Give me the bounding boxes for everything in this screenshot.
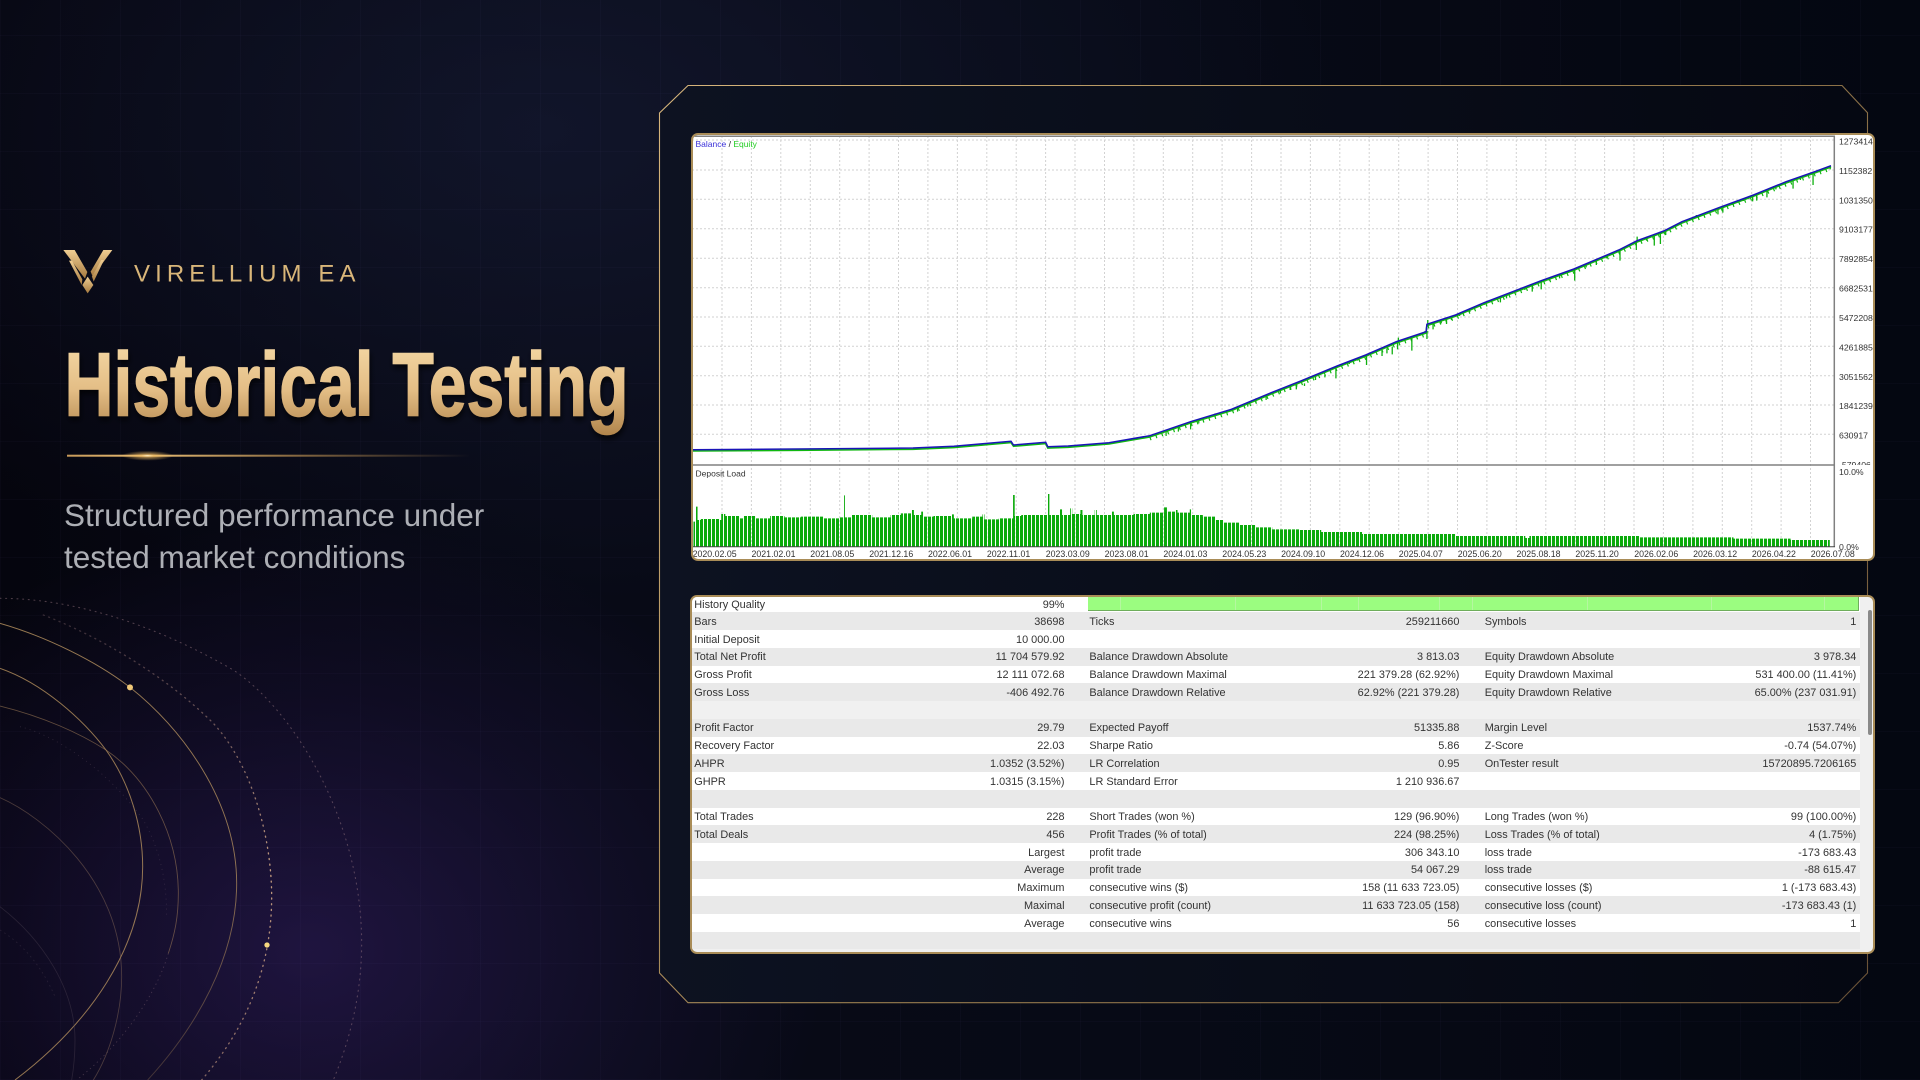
x axis dates: 2022.06.01 bbox=[928, 549, 972, 559]
x axis dates: 2024.12.06 bbox=[1340, 549, 1384, 559]
row: bars: 259211660 bbox=[1406, 616, 1459, 628]
equity line bbox=[693, 167, 1831, 451]
row: gross loss: Equity Drawdown Relative bbox=[1485, 687, 1612, 699]
row: gross profit: 221 379.28 (62.92%) bbox=[1358, 669, 1459, 681]
row: profit factor: 29.79 bbox=[1037, 722, 1064, 734]
row: total net profit bbox=[692, 648, 1860, 666]
y axis values: 3051562 bbox=[1839, 372, 1873, 382]
x axis dates: 2026.07.08 bbox=[1811, 549, 1855, 559]
row: largest trade bbox=[692, 843, 1860, 861]
row: gross loss: 65.00% (237 031.91) bbox=[1755, 687, 1856, 699]
row: total deals: Total Deals bbox=[694, 829, 748, 841]
row: profit factor: Expected Payoff bbox=[1089, 722, 1169, 734]
row: total deals: 4 (1.75%) bbox=[1809, 829, 1856, 841]
chart axes bbox=[692, 136, 1835, 547]
row: total net profit: 11 704 579.92 bbox=[996, 651, 1064, 663]
row: AHPR: 0.95 bbox=[1438, 758, 1459, 770]
panel: backtest statistics table bbox=[690, 595, 1875, 954]
x axis dates: 2025.06.20 bbox=[1458, 549, 1502, 559]
row: recovery factor bbox=[692, 737, 1860, 754]
row: total trades: 129 (96.90%) bbox=[1394, 811, 1459, 823]
row: total net profit: Equity Drawdown Absolute bbox=[1485, 651, 1614, 663]
equity drawdown spikes, early years bbox=[1166, 382, 1297, 436]
row: initial deposit bbox=[692, 630, 1860, 648]
row: largest trade: 306 343.10 bbox=[1405, 847, 1459, 859]
row: average trade: -88 615.47 bbox=[1804, 864, 1856, 876]
row: total net profit: 3 813.03 bbox=[1417, 651, 1459, 663]
row: maximum consecutive: consecutive losses ($) bbox=[1485, 882, 1592, 894]
row: profit factor: Profit Factor bbox=[694, 722, 754, 734]
row: gross loss: 62.92% (221 379.28) bbox=[1358, 687, 1459, 699]
row: gross profit: Balance Drawdown Maximal bbox=[1089, 669, 1227, 681]
row: total trades: 99 (100.00%) bbox=[1791, 811, 1856, 823]
y axis values bbox=[1839, 136, 1873, 552]
row: maximum consecutive: 158 (11 633 723.05) bbox=[1362, 882, 1459, 894]
row: AHPR: OnTester result bbox=[1485, 758, 1559, 770]
row: maximum consecutive: consecutive wins ($) bbox=[1089, 882, 1188, 894]
row: recovery factor: -0.74 (54.07%) bbox=[1784, 740, 1856, 752]
row: gross profit: 12 111 072.68 bbox=[996, 669, 1064, 681]
row: average consecutive: consecutive losses bbox=[1485, 918, 1576, 930]
row: average consecutive: 56 bbox=[1447, 918, 1459, 930]
deposit load bars bbox=[693, 494, 1830, 547]
chart grid bbox=[692, 136, 1834, 546]
x axis dates: 2026.02.06 bbox=[1634, 549, 1678, 559]
y axis values: 7892854 bbox=[1839, 254, 1873, 264]
y axis values: 10.0% bbox=[1839, 467, 1864, 477]
row: GHPR: 1.0315 (3.15%) bbox=[990, 776, 1064, 788]
row: largest trade: loss trade bbox=[1485, 847, 1532, 859]
x axis dates: 2023.08.01 bbox=[1105, 549, 1149, 559]
row: recovery factor: Z-Score bbox=[1485, 740, 1523, 752]
row: total net profit: Total Net Profit bbox=[694, 651, 766, 663]
row: maximal consecutive: consecutive profit (count) bbox=[1089, 900, 1211, 912]
row: profit factor bbox=[692, 719, 1860, 737]
row: total trades: Long Trades (won %) bbox=[1485, 811, 1588, 823]
row: maximal consecutive bbox=[692, 896, 1860, 914]
title: Historical Testing bbox=[64, 336, 628, 436]
x axis dates: 2023.03.09 bbox=[1046, 549, 1090, 559]
row: bars bbox=[692, 612, 1860, 630]
row: gross profit bbox=[692, 666, 1860, 683]
row: average consecutive: 1 bbox=[1850, 918, 1856, 930]
row: AHPR: AHPR bbox=[694, 758, 725, 770]
y axis values: 9103177 bbox=[1839, 225, 1873, 235]
y axis values: -579406 bbox=[1839, 460, 1871, 470]
row: total trades: 228 bbox=[1046, 811, 1064, 823]
row: initial deposit: 10 000.00 bbox=[1016, 634, 1064, 646]
row: GHPR: LR Standard Error bbox=[1089, 776, 1178, 788]
row: maximal consecutive: 11 633 723.05 (158) bbox=[1362, 900, 1459, 912]
row: maximum consecutive bbox=[692, 878, 1860, 896]
row: AHPR: 15720895.7206165 bbox=[1762, 758, 1856, 770]
row: total deals bbox=[692, 825, 1860, 843]
row: gross loss: Gross Loss bbox=[694, 687, 749, 699]
row: GHPR bbox=[692, 772, 1860, 790]
row: average trade: 54 067.29 bbox=[1411, 864, 1459, 876]
row: maximal consecutive: -173 683.43 (1) bbox=[1782, 900, 1856, 912]
row: bars: 38698 bbox=[1034, 616, 1064, 628]
row: AHPR bbox=[692, 754, 1860, 772]
row: recovery factor: 22.03 bbox=[1037, 740, 1064, 752]
row: bars: Ticks bbox=[1089, 616, 1114, 628]
row: largest trade: Largest bbox=[1028, 847, 1064, 859]
row: average trade: profit trade bbox=[1089, 864, 1141, 876]
row: maximal consecutive: Maximal bbox=[1024, 900, 1064, 912]
row: profit factor: 51335.88 bbox=[1414, 722, 1459, 734]
row: total trades: Short Trades (won %) bbox=[1089, 811, 1195, 823]
row: maximal consecutive: consecutive loss (count) bbox=[1485, 900, 1602, 912]
row: total deals: 456 bbox=[1046, 829, 1064, 841]
x axis dates: 2024.05.23 bbox=[1222, 549, 1266, 559]
x axis dates: 2020.02.05 bbox=[693, 549, 737, 559]
x axis dates: 2022.11.01 bbox=[987, 549, 1030, 559]
scrollbar thumb bbox=[1868, 610, 1872, 735]
subtitle: Structured performance under bbox=[64, 497, 484, 533]
row: total deals: 224 (98.25%) bbox=[1394, 829, 1459, 841]
subtitle: tested market conditions bbox=[64, 538, 405, 574]
row: maximum consecutive: 1 (-173 683.43) bbox=[1782, 882, 1856, 894]
row: gross loss bbox=[692, 683, 1860, 701]
panel: balance equity chart bbox=[691, 133, 1875, 561]
row: average consecutive bbox=[692, 914, 1860, 932]
row: average trade bbox=[692, 861, 1860, 879]
row: total deals: Profit Trades (% of total) bbox=[1089, 829, 1207, 841]
row: largest trade: profit trade bbox=[1089, 847, 1141, 859]
y axis values: 1841239 bbox=[1839, 401, 1873, 411]
x axis dates: 2026.03.12 bbox=[1693, 549, 1737, 559]
y axis values: 1031350 bbox=[1839, 195, 1873, 205]
row: profit factor: 1537.74% bbox=[1807, 722, 1856, 734]
row: largest trade: -173 683.43 bbox=[1798, 847, 1856, 859]
x axis dates: 2021.12.16 bbox=[869, 549, 913, 559]
row: total deals: Loss Trades (% of total) bbox=[1485, 829, 1600, 841]
row: total trades: Total Trades bbox=[694, 811, 754, 823]
row: gross loss: Balance Drawdown Relative bbox=[1089, 687, 1226, 699]
row: GHPR: GHPR bbox=[694, 776, 726, 788]
row: history quality bbox=[692, 595, 1860, 613]
chart legend: Balance / Equity bbox=[696, 139, 758, 149]
x axis dates: 2021.08.05 bbox=[810, 549, 854, 559]
row: history quality: 99% bbox=[1043, 598, 1064, 610]
row: profit factor: Margin Level bbox=[1485, 722, 1547, 734]
row: bars: Symbols bbox=[1485, 616, 1526, 628]
row: total net profit: Balance Drawdown Absolute bbox=[1089, 651, 1228, 663]
row: recovery factor: 5.86 bbox=[1438, 740, 1459, 752]
blank row bbox=[692, 790, 1860, 808]
equity sawtooth bbox=[1150, 168, 1831, 438]
row: gross profit: Gross Profit bbox=[694, 669, 752, 681]
row: average consecutive: Average bbox=[1024, 918, 1064, 930]
y axis values: 6682531 bbox=[1839, 284, 1873, 294]
row: gross profit: Equity Drawdown Maximal bbox=[1485, 669, 1613, 681]
row: gross profit: 531 400.00 (11.41%) bbox=[1755, 669, 1856, 681]
row: bars: Bars bbox=[694, 616, 717, 628]
y axis values: 1152382 bbox=[1839, 166, 1872, 176]
x axis dates: 2026.04.22 bbox=[1752, 549, 1796, 559]
deposit load label: Deposit Load bbox=[696, 469, 746, 479]
x axis dates: 2021.02.01 bbox=[752, 549, 796, 559]
equity drawdown spikes, later years bbox=[1290, 166, 1830, 390]
row: gross loss: -406 492.76 bbox=[1006, 687, 1064, 699]
row: history quality: History Quality bbox=[694, 598, 765, 610]
row: maximum consecutive: Maximum bbox=[1017, 882, 1064, 894]
brand name: VIRELLIUM EA bbox=[134, 261, 356, 288]
y axis values: 1273414 bbox=[1839, 136, 1873, 146]
x axis dates: 2025.04.07 bbox=[1399, 549, 1443, 559]
row: average trade: Average bbox=[1024, 864, 1064, 876]
y axis values: 5472208 bbox=[1839, 313, 1873, 323]
blank row bbox=[692, 932, 1860, 949]
row: bars: 1 bbox=[1850, 616, 1856, 628]
history quality bar bbox=[1088, 597, 1859, 611]
row: AHPR: LR Correlation bbox=[1089, 758, 1160, 770]
x axis dates: 2024.01.03 bbox=[1163, 549, 1208, 559]
row: recovery factor: Sharpe Ratio bbox=[1089, 740, 1153, 752]
subtitle bbox=[64, 497, 484, 574]
row: GHPR: 1 210 936.67 bbox=[1396, 776, 1459, 788]
row: recovery factor: Recovery Factor bbox=[694, 740, 774, 752]
row: total trades bbox=[692, 808, 1860, 825]
y axis values: 0.0% bbox=[1839, 542, 1859, 552]
x axis dates: 2025.11.20 bbox=[1575, 549, 1619, 559]
x axis dates: 2025.08.18 bbox=[1516, 549, 1561, 559]
y axis values: 4261885 bbox=[1839, 342, 1873, 352]
row: average consecutive: consecutive wins bbox=[1089, 918, 1172, 930]
row: average trade: loss trade bbox=[1485, 864, 1532, 876]
row: AHPR: 1.0352 (3.52%) bbox=[990, 758, 1064, 770]
x axis dates bbox=[693, 549, 1855, 559]
row: total net profit: 3 978.34 bbox=[1814, 651, 1856, 663]
y axis values: 630917 bbox=[1839, 431, 1868, 441]
row: initial deposit: Initial Deposit bbox=[694, 634, 760, 646]
balance line bbox=[693, 166, 1831, 450]
x axis dates: 2024.09.10 bbox=[1281, 549, 1325, 559]
